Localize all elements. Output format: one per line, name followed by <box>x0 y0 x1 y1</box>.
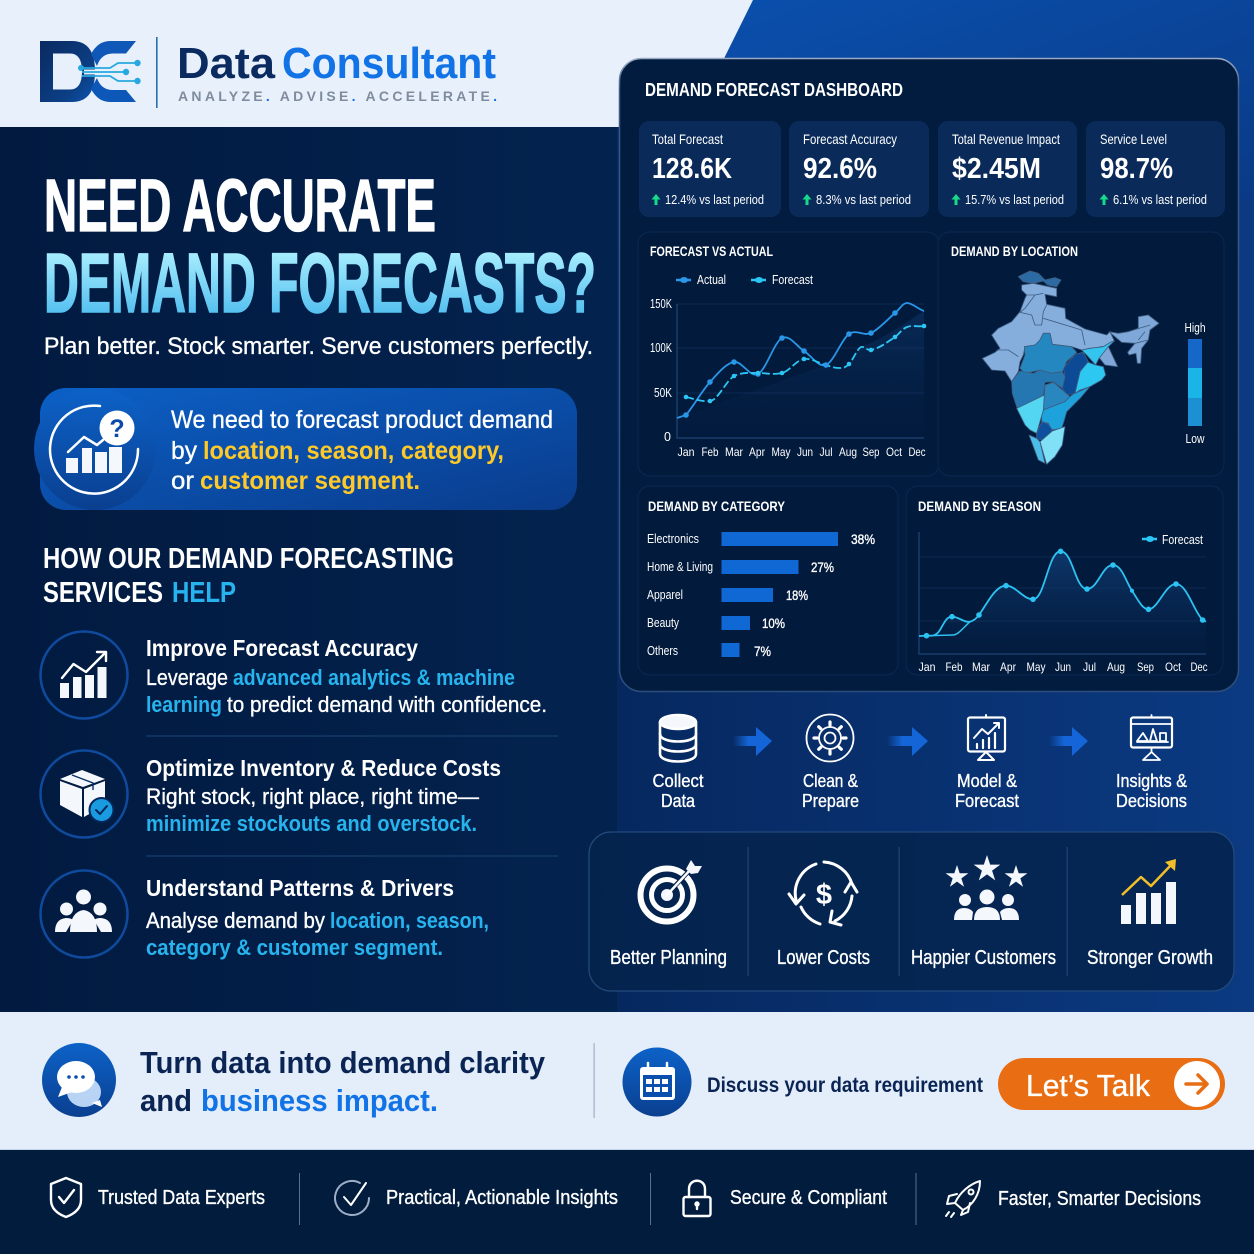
process: insights and decisions: Insights & <box>1116 771 1187 791</box>
process: model and forecast: Model & <box>957 771 1017 791</box>
section heading: SERVICES <box>43 577 163 609</box>
line chart: May <box>772 445 790 459</box>
panel: demand by season: DEMAND BY SEASON <box>918 498 1041 514</box>
panel: demand by location <box>938 232 1224 476</box>
process: model and forecast <box>955 715 1019 811</box>
background: left navy column <box>0 120 617 1020</box>
trust: secure: Secure & Compliant <box>730 1187 887 1209</box>
section heading <box>43 543 454 609</box>
process: insights and decisions <box>1116 715 1187 811</box>
arrow <box>887 727 928 756</box>
icon: check circle <box>335 1181 369 1215</box>
line chart: Sep <box>862 445 880 459</box>
KPI: revenue impact <box>938 121 1077 217</box>
benefit: better planning: Better Planning <box>610 947 727 969</box>
icon: database <box>660 715 696 762</box>
text: location, season, <box>330 908 489 933</box>
panel: demand by location: DEMAND BY LOCATION <box>951 243 1078 259</box>
line chart: Oct <box>886 445 903 459</box>
line chart: Feb <box>702 445 719 459</box>
icon: chart with question mark: ? <box>109 415 125 443</box>
bar chart: 7% <box>754 644 771 659</box>
trust: insights: Practical, Actionable Insights <box>386 1187 618 1209</box>
benefit: better planning <box>610 860 727 969</box>
line chart: 100K <box>650 341 672 355</box>
panel: dashboard <box>620 58 1238 692</box>
area chart: Sep <box>1137 660 1154 674</box>
line chart: Jan <box>678 445 694 459</box>
text: minimize stockouts and overstock. <box>146 811 477 836</box>
icon: growth bars <box>1121 859 1176 924</box>
icon: chat bubbles <box>42 1043 116 1117</box>
area chart: Oct <box>1165 660 1182 674</box>
icon: target <box>640 860 702 922</box>
KPI: forecast accuracy: 92.6% <box>803 153 877 185</box>
area chart: Mar <box>972 660 990 674</box>
area chart: Jul <box>1083 660 1096 674</box>
area chart: Jan <box>918 660 936 674</box>
text: Improve Forecast Accuracy <box>146 635 418 661</box>
benefit: lower costs <box>777 862 870 969</box>
call to action band <box>0 1012 1254 1149</box>
area chart: Jun <box>1055 660 1071 674</box>
process: collect data: Collect <box>652 771 704 791</box>
line chart: Jun <box>797 445 813 459</box>
service: improve forecast accuracy <box>40 632 547 718</box>
trust: faster <box>946 1181 1201 1217</box>
icon: dollar cycle: $ <box>816 879 832 911</box>
KPI: forecast accuracy: Forecast Accuracy <box>803 131 897 147</box>
map legend: Low <box>1186 432 1205 446</box>
legend: Actual <box>697 273 726 287</box>
benefit: stronger growth: Stronger Growth <box>1087 947 1213 969</box>
KPI: service level: 98.7% <box>1100 153 1173 185</box>
text: learning <box>146 692 222 717</box>
text: category & customer segment. <box>146 935 443 960</box>
tagline: ANALYZE. ADVISE. ACCELERATE. <box>178 88 497 104</box>
subtitle: Plan better. Stock smarter. Serve customers perfectly. <box>44 333 593 360</box>
brand name: Data <box>177 39 276 88</box>
button: let's talk: Let’s Talk <box>1026 1068 1150 1103</box>
CTA headline: Turn data into demand clarity <box>140 1045 546 1080</box>
callout text: or <box>171 467 194 495</box>
CTA label: Discuss your data requirement <box>707 1074 983 1097</box>
dashboard heading: DEMAND FORECAST DASHBOARD <box>645 80 903 100</box>
trust: experts <box>51 1178 265 1217</box>
section heading: HELP <box>172 577 236 609</box>
area chart: May <box>1026 660 1046 674</box>
area chart: Dec <box>1190 660 1208 674</box>
icon: box with check <box>40 750 128 838</box>
callout text: customer segment. <box>200 467 420 495</box>
benefit: stronger growth <box>1087 859 1213 969</box>
bar chart: Others <box>647 644 678 658</box>
process: model and forecast: Forecast <box>955 791 1019 811</box>
process: collect data: Data <box>661 791 696 811</box>
trust: faster: Faster, Smarter Decisions <box>998 1188 1201 1210</box>
line chart: 150K <box>650 297 672 311</box>
title <box>44 164 596 330</box>
footer bar <box>0 1149 1254 1254</box>
KPI: total forecast: Total Forecast <box>652 131 723 147</box>
background: top-right blue corner <box>690 0 1254 200</box>
service: optimize inventory <box>40 750 501 838</box>
icon: calendar <box>622 1048 692 1116</box>
arrow <box>1049 727 1088 756</box>
line chart: 50K <box>654 386 673 400</box>
title: DEMAND FORECASTS? <box>44 236 596 330</box>
line chart: Dec <box>908 445 926 459</box>
line chart: Aug <box>839 445 857 459</box>
benefit: lower costs: Lower Costs <box>777 947 870 969</box>
bar chart <box>647 532 875 659</box>
area chart: Apr <box>1000 660 1016 674</box>
icon: shield <box>51 1178 81 1217</box>
text: Understand Patterns & Drivers <box>146 875 454 901</box>
KPI: revenue impact: $2.45M <box>952 153 1041 185</box>
text: advanced analytics & machine <box>233 665 515 690</box>
bar chart: Electronics <box>647 532 699 546</box>
panel: demand by category <box>638 486 898 675</box>
KPI: forecast accuracy <box>789 121 929 217</box>
line chart: Apr <box>749 445 765 459</box>
bar chart: Apparel <box>647 588 683 602</box>
line chart: Mar <box>725 445 743 459</box>
text <box>146 635 547 717</box>
KPI: service level: Service Level <box>1100 131 1167 147</box>
trust: insights <box>335 1181 618 1215</box>
bar chart: 38% <box>851 532 875 547</box>
line chart: Jul <box>820 445 832 459</box>
line chart: 0 <box>664 430 671 444</box>
KPI: forecast accuracy: 8.3% vs last period <box>816 192 911 207</box>
KPI: total forecast <box>639 121 781 217</box>
panel: demand by season <box>906 486 1223 675</box>
process: clean and prepare: Prepare <box>802 791 859 811</box>
KPI: revenue impact: 15.7% vs last period <box>965 192 1064 207</box>
trust: experts: Trusted Data Experts <box>98 1187 265 1209</box>
icon: people <box>40 870 128 958</box>
icon: rocket <box>946 1181 980 1217</box>
button: let's talk <box>998 1058 1225 1110</box>
process: collect data <box>652 715 704 811</box>
map of India <box>982 271 1159 464</box>
text: Analyse demand by <box>146 908 326 933</box>
legend: Forecast <box>772 273 813 287</box>
area chart: Aug <box>1107 660 1125 674</box>
CTA headline: and <box>140 1083 192 1118</box>
map legend: High <box>1184 321 1206 335</box>
background: right blue column <box>617 120 1254 1020</box>
brand name <box>177 39 496 88</box>
logo <box>40 37 497 108</box>
background: top light header band <box>0 0 753 127</box>
panel: benefits <box>589 832 1234 991</box>
benefit: happier customers: Happier Customers <box>911 947 1056 969</box>
logo mark <box>40 41 141 102</box>
icon: presentation chart <box>968 715 1005 760</box>
panel: forecast vs actual: FORECAST VS ACTUAL <box>650 243 773 259</box>
icon: rising bars <box>40 632 128 718</box>
KPI: service level <box>1086 121 1225 217</box>
CTA headline: business impact. <box>201 1083 438 1118</box>
KPI: service level: 6.1% vs last period <box>1113 192 1207 207</box>
brand name: Consultant <box>282 39 496 88</box>
bar chart: 27% <box>811 560 834 575</box>
text: to predict demand with confidence. <box>227 692 547 717</box>
KPI: revenue impact: Total Revenue Impact <box>952 131 1060 147</box>
text <box>146 755 501 836</box>
process: clean and prepare <box>802 714 859 811</box>
callout text: We need to forecast product demand <box>171 406 553 434</box>
icon: stars and people <box>946 855 1027 920</box>
arrow <box>733 727 772 756</box>
KPI: total forecast: 128.6K <box>652 153 732 185</box>
callout text: by <box>171 437 197 465</box>
icon: gear <box>806 714 854 762</box>
section heading: HOW OUR DEMAND FORECASTING <box>43 543 454 575</box>
text: Leverage <box>146 665 228 690</box>
icon: insights board <box>1131 715 1172 760</box>
process: insights and decisions: Decisions <box>1116 791 1187 811</box>
CTA headline <box>140 1045 546 1118</box>
icon: chart with question mark <box>50 406 138 494</box>
text: Right stock, right place, right time— <box>146 784 479 809</box>
title: NEED ACCURATE <box>44 164 436 247</box>
process: clean and prepare: Clean & <box>803 771 858 791</box>
panel: demand by category: DEMAND BY CATEGORY <box>648 498 786 514</box>
text: Optimize Inventory & Reduce Costs <box>146 755 501 781</box>
map legend <box>1184 321 1206 446</box>
bar chart: Home & Living <box>647 560 713 574</box>
bar chart: Beauty <box>647 616 680 630</box>
service: understand patterns <box>40 870 489 960</box>
panel: forecast vs actual <box>638 232 939 476</box>
callout <box>34 388 577 510</box>
area chart <box>918 532 1208 674</box>
icon: lock <box>684 1181 710 1216</box>
bar chart: 10% <box>762 616 785 631</box>
area chart: Feb <box>946 660 963 674</box>
KPI: total forecast: 12.4% vs last period <box>665 192 764 207</box>
line chart <box>650 297 926 459</box>
area chart: Forecast <box>1162 533 1203 547</box>
text <box>146 875 489 960</box>
bar chart: 18% <box>786 588 808 603</box>
benefit: happier customers <box>911 855 1056 969</box>
legend <box>676 273 813 287</box>
trust: secure <box>684 1181 887 1216</box>
callout text: location, season, category, <box>203 437 504 465</box>
callout text <box>171 406 553 495</box>
